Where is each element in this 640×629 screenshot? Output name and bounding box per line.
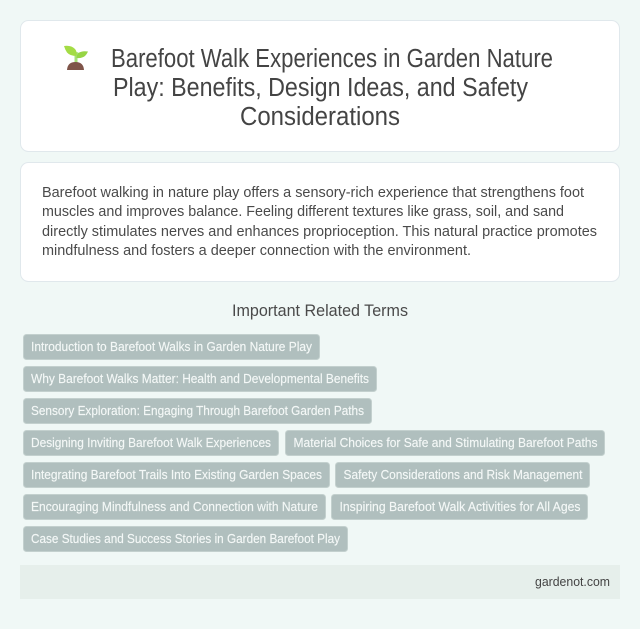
- tag: Sensory Exploration: Engaging Through Barefoot Garden Paths: [31, 403, 364, 418]
- panel: description card: [20, 162, 620, 282]
- tag: Integrating Barefoot Trails Into Existing Garden Spaces: [31, 467, 322, 482]
- tag: [24, 430, 278, 456]
- description text: mindfulness and fosters a deeper connection with the environment.: [42, 242, 471, 259]
- tag: Why Barefoot Walks Matter: Health and Developmental Benefits: [31, 371, 369, 386]
- tag: [332, 494, 588, 520]
- tag: [24, 334, 320, 360]
- tag: Safety Considerations and Risk Management: [344, 467, 583, 482]
- title text: Play: Benefits, Design Ideas, and Safety: [113, 74, 528, 102]
- heading: important related terms: Important Related Terms: [232, 301, 408, 320]
- tag: [24, 366, 376, 392]
- description text: directly stimulates nerves and enhances proprioception. This natural practice promotes: [42, 223, 597, 240]
- tag: Inspiring Barefoot Walk Activities for All Ages: [340, 499, 581, 514]
- description text: [42, 184, 597, 259]
- tag: [336, 462, 590, 488]
- panel: title card: [20, 20, 620, 152]
- tag: Encouraging Mindfulness and Connection with Nature: [31, 499, 318, 514]
- tag: [24, 526, 348, 552]
- description text: muscles and improves balance. Feeling different textures like grass, soil, and sand: [42, 203, 564, 220]
- icon: seedling: [64, 46, 88, 70]
- tag: [286, 430, 604, 456]
- tag: [24, 398, 372, 424]
- title text: Barefoot Walk Experiences in Garden Nature: [111, 45, 553, 73]
- footer text: gardenot.com: [535, 574, 610, 589]
- title text: [111, 45, 553, 131]
- footer bar: [20, 565, 620, 599]
- tag: [24, 462, 330, 488]
- panel: related term tags: [24, 334, 604, 552]
- title text: Considerations: [240, 103, 400, 131]
- description text: Barefoot walking in nature play offers a sensory-rich experience that strengthens foot: [42, 184, 585, 201]
- tag: [24, 494, 326, 520]
- tag: Case Studies and Success Stories in Garden Barefoot Play: [31, 531, 340, 546]
- tag: Material Choices for Safe and Stimulating Barefoot Paths: [294, 435, 598, 450]
- tag: Designing Inviting Barefoot Walk Experiences: [31, 435, 271, 450]
- tag: Introduction to Barefoot Walks in Garden Nature Play: [31, 339, 312, 354]
